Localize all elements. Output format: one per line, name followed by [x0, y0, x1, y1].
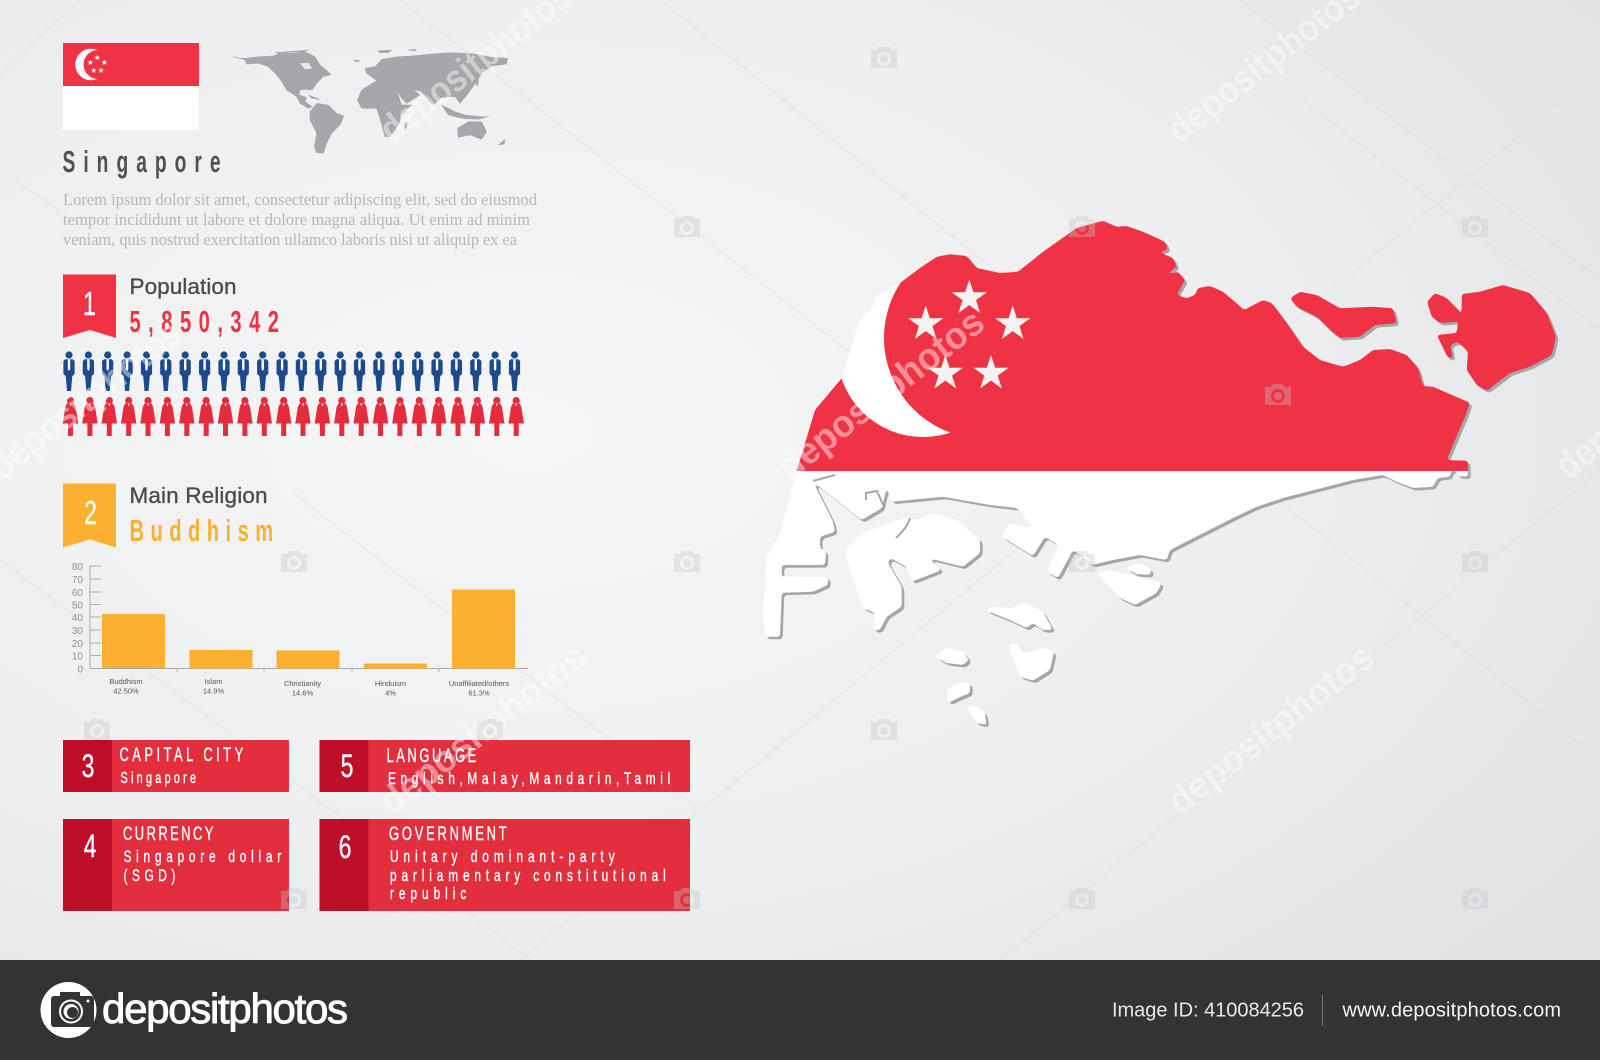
population heading: Population	[130, 274, 236, 299]
panel: government: 6	[339, 829, 351, 865]
panel: language: English,Malay,Mandarin,Tamil	[388, 770, 670, 789]
bar chart	[72, 562, 528, 698]
bar chart: 0	[77, 664, 83, 676]
footer logo text: depositphotos	[102, 985, 348, 1032]
panel: currency	[63, 819, 289, 911]
panel: capital city: 3	[82, 748, 94, 784]
population value: 5,850,342	[130, 304, 279, 339]
panel: language: 5	[341, 748, 353, 784]
bar chart: 80	[72, 562, 83, 573]
panel: government: parliamentary constitutional	[390, 867, 666, 886]
religion heading: Main Religion	[130, 483, 268, 508]
website: www.depositphotos.com	[1342, 1000, 1561, 1022]
bar chart: 42.50%	[113, 686, 139, 696]
panel: currency: (SGD)	[124, 867, 175, 886]
main island with flag	[763, 221, 1470, 637]
bar chart: Buddhism	[109, 677, 143, 686]
bar chart: Hinduism	[375, 679, 406, 688]
map shadow	[766, 223, 1559, 728]
icons: men	[63, 351, 520, 391]
panel: currency: CURRENCY	[123, 824, 214, 845]
southern islands	[845, 513, 1162, 725]
watermark: depositphotos	[372, 636, 595, 823]
panel: government	[320, 819, 690, 911]
description text: veniam, quis nostrud exercitation ullamco laboris nisi ut aliquip ex ea	[63, 230, 518, 249]
badge 1: 1	[83, 286, 96, 323]
image id: Image ID: 410084256	[1112, 1000, 1304, 1022]
panel: government: GOVERNMENT	[389, 824, 507, 845]
bar chart: 30	[72, 626, 83, 637]
watermark camera icons	[84, 47, 1488, 909]
panel: government: Unitary dominant-party	[390, 848, 615, 867]
eastern islands	[1290, 285, 1556, 391]
bar chart: 4%	[385, 688, 396, 698]
footer bar	[0, 960, 1600, 1060]
world map	[233, 49, 508, 153]
footer logo icon	[40, 982, 96, 1038]
watermark: depositphotos	[1160, 636, 1383, 823]
description text	[63, 190, 538, 249]
religion section	[63, 483, 273, 548]
panel: government: republic	[390, 885, 466, 904]
bar chart: 14.9%	[203, 686, 224, 696]
population section	[63, 274, 524, 436]
badge 2: 2	[84, 495, 97, 532]
description text: tempor incididunt ut labore et dolore magna aliqua. Ut enim ad minim	[63, 210, 530, 229]
Singapore map	[750, 200, 1559, 728]
badge 2	[63, 484, 116, 548]
bar chart: 70	[72, 575, 83, 586]
panel: currency: 4	[84, 828, 96, 864]
panel: currency: Singapore dollar	[124, 848, 281, 867]
description text: Lorem ipsum dolor sit amet, consectetur adipiscing elit, sed do eiusmod	[63, 190, 538, 209]
bar chart: 60	[72, 588, 83, 599]
bar chart: 50	[72, 600, 83, 612]
panel: capital city: CAPITAL CITY	[120, 745, 243, 766]
title: Singapore	[62, 146, 221, 179]
panel: capital city	[63, 740, 289, 792]
panel: capital city: Singapore	[120, 769, 196, 786]
flag	[63, 43, 199, 130]
religion value: Buddhism	[130, 513, 273, 548]
bar chart: Islam	[205, 677, 222, 686]
bar chart: 14.6%	[292, 688, 313, 698]
watermark: depositphotos	[770, 301, 993, 488]
panel: language	[320, 740, 690, 792]
bar chart: Christianity	[284, 679, 321, 688]
badge 1	[63, 274, 116, 338]
watermark	[0, 0, 1600, 823]
flag stars	[908, 280, 1030, 388]
icons: women	[63, 397, 524, 436]
bar chart: 61.3%	[468, 688, 490, 698]
bar chart: 40	[72, 613, 83, 624]
panel: language: LANGUAGE	[386, 746, 476, 767]
bar chart: 20	[72, 639, 83, 650]
bar chart: 10	[72, 652, 83, 662]
bar chart: Unaffiliated/others	[449, 679, 509, 688]
